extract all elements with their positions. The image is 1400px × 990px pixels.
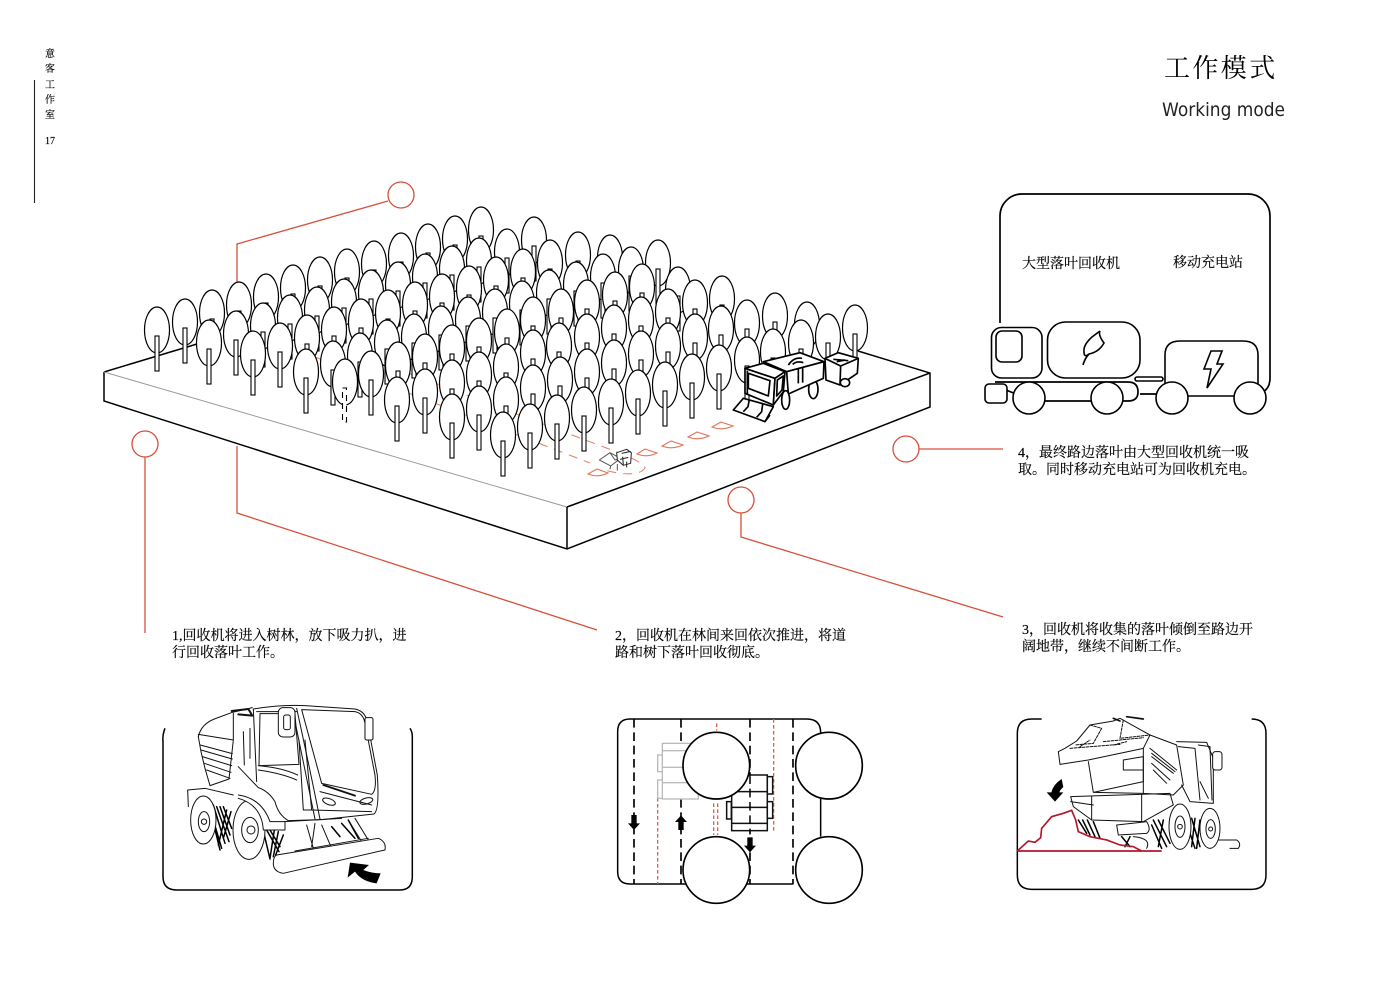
gray previous-pass machine bbox=[658, 743, 698, 799]
side label: studio name and page number: 室 bbox=[45, 109, 55, 121]
tyre treads bbox=[212, 805, 358, 859]
icon: lightning bolt bbox=[1204, 351, 1223, 388]
text: step 1: 1,回收机将进入树林，放下吸力扒，进 bbox=[172, 627, 406, 644]
direction arrows bbox=[628, 815, 756, 852]
side label: studio name and page number: 工 bbox=[45, 79, 55, 91]
side label: studio name and page number: 17 bbox=[45, 136, 55, 147]
red callout: step 1 bbox=[132, 431, 158, 633]
red pile of dumped leaves bbox=[1017, 810, 1162, 851]
small leaf collector on road bbox=[599, 449, 631, 471]
large recycler truck with trailer on road bbox=[733, 353, 858, 422]
tyre treads bbox=[1078, 818, 1200, 848]
title: Working mode bbox=[1162, 99, 1285, 121]
text: step 2: 路和树下落叶回收彻底。 bbox=[615, 644, 769, 661]
title: 工作模式 bbox=[1164, 54, 1278, 83]
red callout: step 2 bbox=[237, 446, 597, 630]
panel: step 2 back-and-forth route plan bbox=[618, 719, 862, 903]
red callout: step 4 bbox=[893, 436, 1003, 462]
forest of trees bbox=[144, 207, 868, 476]
side label: studio name and page number: 作 bbox=[45, 93, 55, 106]
side label: studio name and page number: 客 bbox=[45, 63, 55, 75]
text: step 1: 行回收落叶工作。 bbox=[172, 644, 284, 661]
label: mobile charging station: 移动充电站 bbox=[1173, 254, 1243, 271]
icon: black curved down arrow bbox=[1047, 779, 1063, 802]
title bbox=[1162, 54, 1285, 121]
text: step 3: 阔地带，继续不间断工作。 bbox=[1022, 638, 1190, 655]
platform: isometric ground slab bbox=[104, 344, 930, 549]
text: step 4: 4，最终路边落叶由大型回收机统一吸 bbox=[1018, 444, 1249, 461]
red leaf piles along road bbox=[588, 422, 733, 476]
red callout: circle above forest bbox=[237, 182, 414, 284]
panel: step 3 dumping leaves sketch bbox=[1017, 717, 1266, 889]
black current-pass machine bbox=[727, 775, 773, 831]
label: large leaf recycler: 大型落叶回收机 bbox=[1022, 255, 1120, 272]
red callout: step 3 bbox=[728, 487, 1003, 617]
text: step 4: 取。同时移动充电站可为回收机充电。 bbox=[1018, 461, 1256, 478]
panel: large recycler and mobile charging station diagram bbox=[985, 194, 1270, 414]
side label: studio name and page number: 意 bbox=[45, 48, 55, 60]
red dashed route on platform bbox=[315, 350, 645, 474]
panel: step 1 machine sketch bbox=[163, 705, 412, 890]
text: step 2: 2，回收机在林间来回依次推进，将道 bbox=[615, 627, 846, 644]
icon: leaf bbox=[1083, 331, 1104, 365]
text: step 3: 3，回收机将收集的落叶倾倒至路边开 bbox=[1022, 621, 1253, 638]
icon: black curved arrow bbox=[348, 863, 381, 883]
side label: studio name and page number bbox=[34, 48, 55, 203]
